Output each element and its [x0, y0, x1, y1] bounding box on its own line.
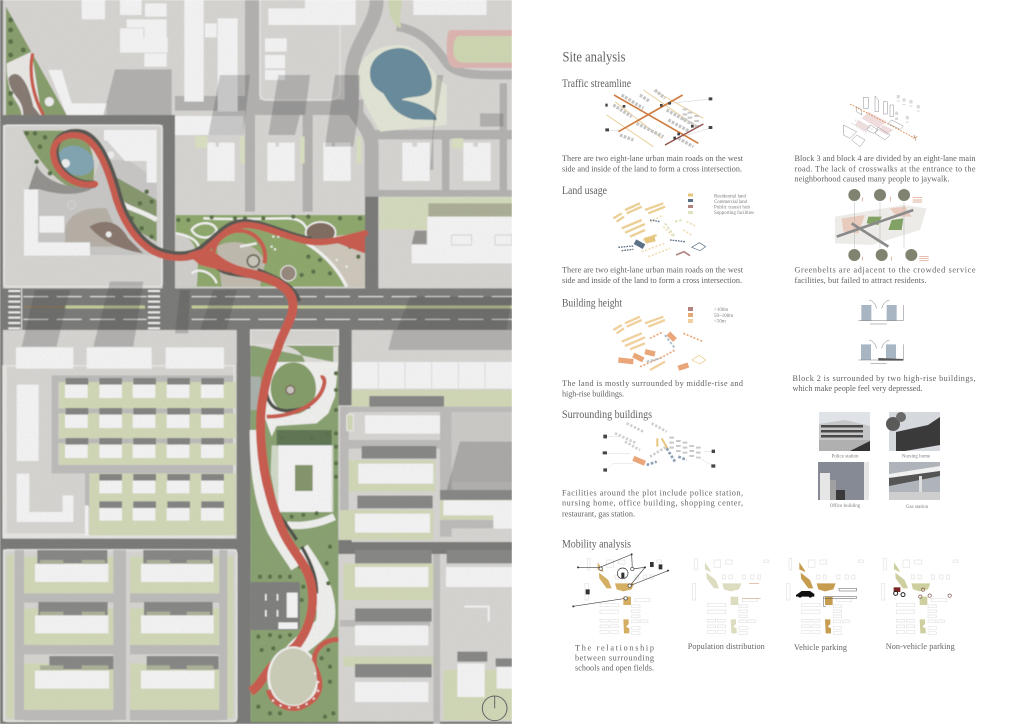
legend: >100m [714, 308, 728, 313]
traffic diagram [605, 90, 712, 147]
land use diagram [613, 203, 706, 257]
roads [0, 0, 512, 724]
paragraph line two: facilities, but failed to attract residents. [794, 276, 926, 285]
plan: schools and open fields [572, 553, 669, 634]
isometric line drawing [843, 95, 918, 147]
heading: Traffic streamline [562, 76, 631, 90]
section: mobility analysis [562, 537, 958, 673]
legend: <50m [714, 320, 726, 324]
caption two: Population distribution [688, 642, 765, 651]
caption one: schools and open fields. [575, 664, 654, 673]
section: crosswalk diagram [794, 95, 976, 184]
paragraph line two: high-rise buildings. [562, 390, 624, 399]
paragraph line two: road. The lack of crosswalks at the entrance to the [794, 164, 976, 174]
top of south blocks [4, 331, 237, 369]
paragraph line two: side and inside of the land to form a cross intersection. [562, 164, 742, 174]
legend: Commercial land [714, 200, 748, 205]
base blocks [0, 0, 512, 724]
title: Site analysis [562, 50, 626, 66]
surrounding diagram [603, 423, 715, 472]
heading: Surrounding buildings [562, 407, 652, 421]
building height diagram [613, 317, 706, 370]
site plan map [0, 0, 512, 724]
block 1 [4, 125, 162, 287]
section: building height [562, 296, 743, 399]
caption three: Vehicle parking [794, 643, 847, 652]
legend [688, 194, 754, 216]
block edges top [260, 0, 340, 100]
ribbon upper section [53, 133, 365, 302]
paragraph: There are two eight-lane urban main roads on the west [562, 266, 744, 275]
paragraph line two: side and inside of the land to form a cross intersection. [562, 276, 742, 285]
lower right of top: big building [379, 197, 512, 287]
heading: Building height [562, 296, 623, 310]
photo: office building: Office building [830, 504, 861, 509]
caption four: Non-vehicle parking [886, 642, 955, 651]
housing towers [207, 143, 491, 181]
photo: gas station: Gas station [906, 505, 929, 510]
median strip [251, 330, 338, 722]
green strips and tower shades [195, 136, 463, 163]
paragraph: There are two eight-lane urban main roads on the west [562, 154, 744, 163]
top right green edge [388, 0, 402, 28]
top buildings [48, 0, 487, 135]
legend [688, 307, 733, 324]
running track [447, 30, 512, 68]
paving paths [175, 0, 512, 212]
section: building spacing [792, 300, 976, 393]
road markings [14, 288, 512, 330]
ribbon lower section [213, 257, 338, 709]
panel: site analysis text [562, 50, 976, 673]
mobility diagrams [572, 553, 958, 634]
greenbelt diagram [835, 189, 929, 261]
legend: Supporting facilities [714, 211, 754, 216]
paragraph line two: which make people feel very depressed. [792, 384, 922, 393]
north arrow [482, 696, 507, 721]
paragraph line two: nursing home, office building, shopping center, [562, 499, 743, 508]
section: surrounding buildings [562, 407, 743, 518]
paragraph: Facilities around the plot include police station, [562, 489, 743, 498]
plan: vehicle parking [787, 558, 863, 634]
pond [358, 45, 447, 132]
heading: Land usage [562, 183, 607, 197]
photo: nursing home: Nursing home [902, 455, 931, 460]
section: greenbelts [794, 189, 976, 285]
paragraph line three: restaurant, gas station. [562, 509, 635, 518]
legend: Residential land [714, 194, 746, 200]
bottom left housing [4, 550, 237, 721]
top left wedge [6, 7, 67, 115]
photo: police station: Police station [831, 455, 859, 460]
paragraph: Block 3 and block 4 are divided by an eight-lane main [794, 154, 976, 163]
caption one: between surrounding [575, 654, 654, 663]
south east housing [340, 362, 512, 724]
photos [818, 412, 940, 510]
paragraph: Greenbelts are adjacent to the crowded service [794, 266, 976, 275]
section diagrams [858, 300, 903, 363]
legend: 50~100m [714, 314, 733, 319]
center block [176, 215, 365, 287]
section: land usage [562, 183, 754, 285]
paragraph: The land is mostly surrounded by middle-rise and [562, 379, 743, 388]
building shadows [22, 69, 512, 490]
paragraph: Block 2 is surrounded by two high-rise buildings, [792, 374, 976, 383]
plan: population distribution [692, 558, 769, 634]
caption one: The relationship [575, 644, 654, 653]
south west housing rows [4, 367, 236, 537]
caption one [575, 644, 654, 673]
section: traffic streamline [562, 76, 744, 174]
plan: non-vehicle parking [881, 558, 958, 634]
heading: Mobility analysis [562, 537, 631, 551]
legend: Public transit hub [714, 206, 750, 210]
texture [0, 0, 512, 724]
paragraph line three: neighborhood caused many people to jaywalk. [794, 175, 950, 184]
